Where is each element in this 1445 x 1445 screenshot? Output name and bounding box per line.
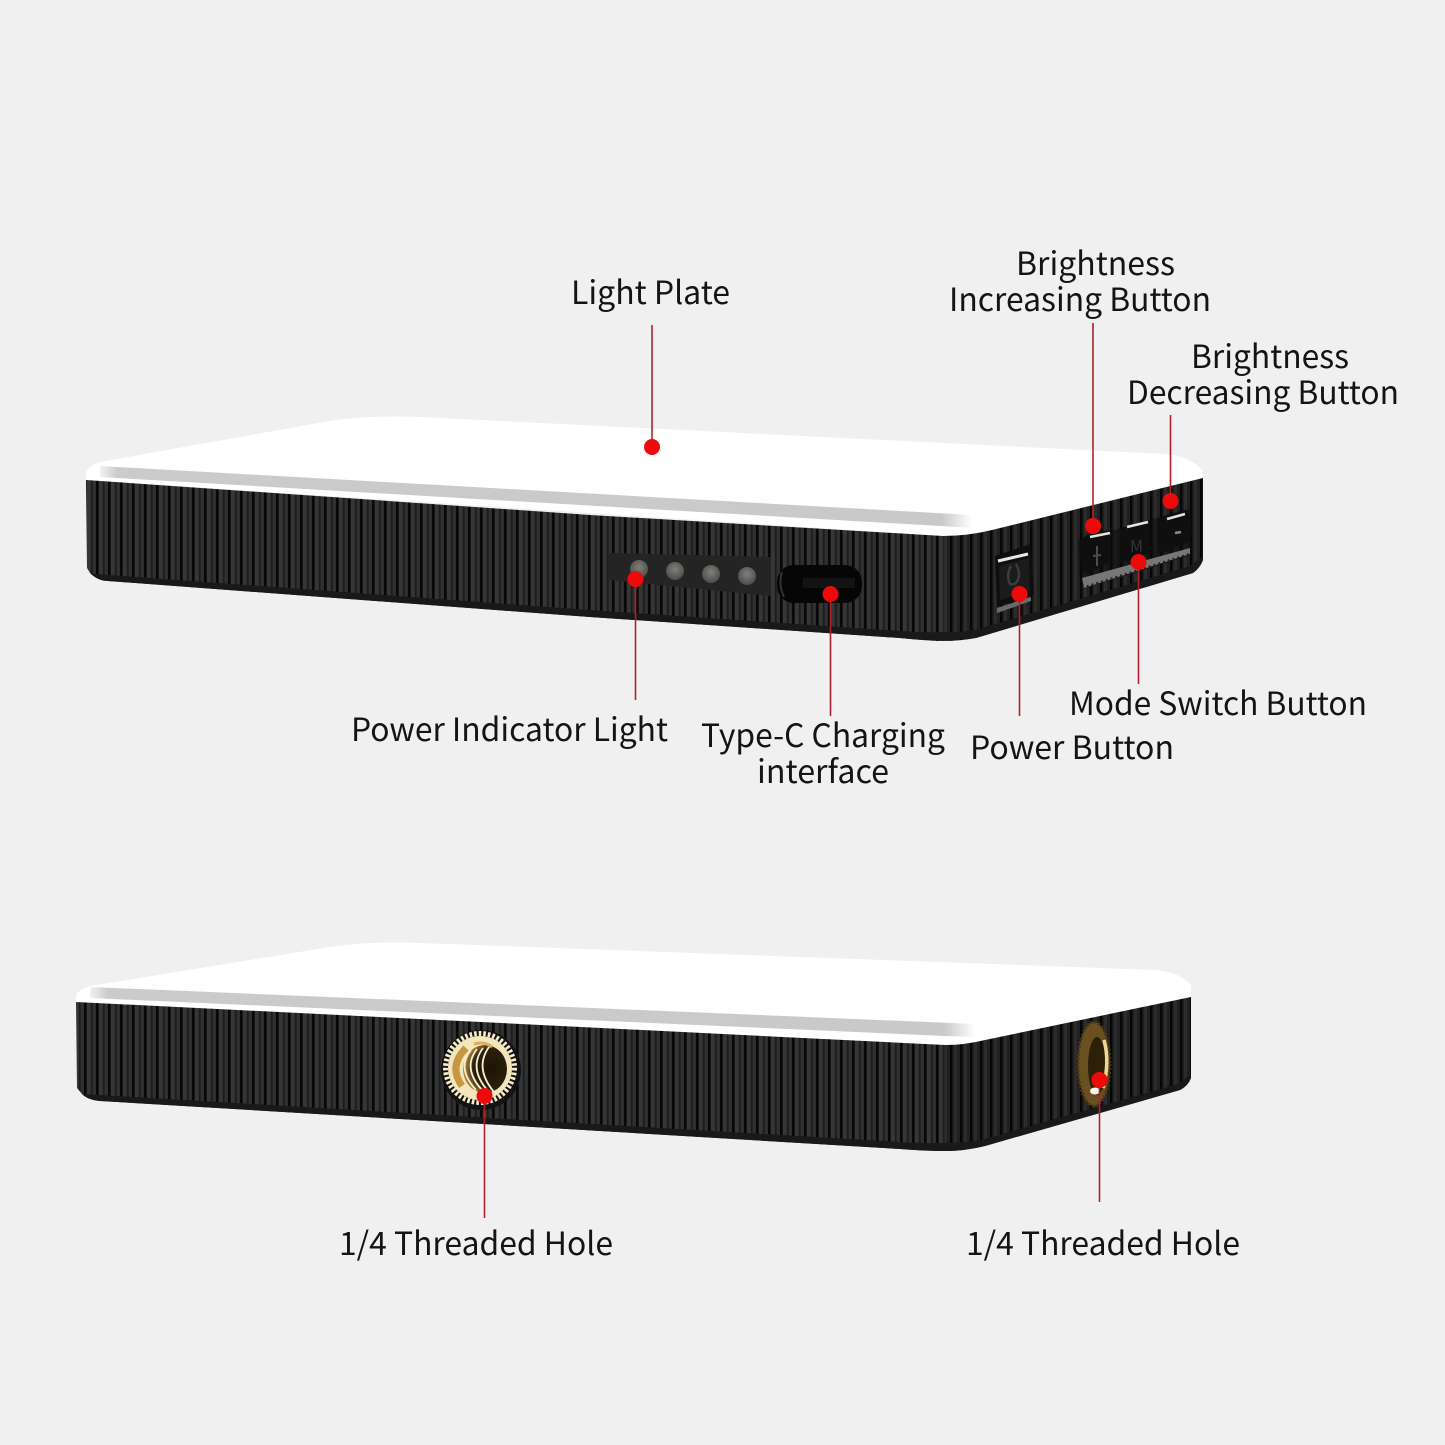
ribbed front side: [86, 480, 943, 641]
callout: Power Indicator Light: [351, 571, 668, 751]
callout: Type-C Charging interface: interface: [757, 747, 889, 793]
ribbed right side: [943, 478, 1203, 641]
side threaded insert: [1078, 1022, 1110, 1106]
ribbed right side: [945, 997, 1191, 1151]
light plate: [76, 942, 1191, 1045]
callout: front 1/4 Threaded Hole: [339, 1088, 613, 1265]
Type-C port: [777, 565, 862, 603]
bottom dark edge: [82, 1074, 1191, 1151]
callout: Brightness Increasing Button: Brightness: [1016, 239, 1175, 285]
callout: Brightness Decreasing Button: Decreasing Button: [1127, 368, 1399, 414]
callout: Mode Switch Button: [1069, 554, 1367, 725]
callout: Power Button: Power Button: [970, 723, 1174, 769]
callout: Brightness Increasing Button: [949, 239, 1211, 534]
device: top view with controls: [86, 416, 1203, 641]
ribbed front side: [76, 1002, 945, 1151]
bottom dark edge: [92, 556, 1203, 640]
power indicator panel with LEDs: [608, 553, 771, 596]
callout: side 1/4 Threaded Hole: 1/4 Threaded Hole: [966, 1219, 1240, 1265]
front threaded insert: [441, 1030, 521, 1110]
callout: front 1/4 Threaded Hole: 1/4 Threaded Hole: [339, 1219, 613, 1265]
callout: Type-C Charging interface: [701, 586, 945, 793]
callout: Brightness Decreasing Button: [1127, 332, 1399, 509]
callout: Mode Switch Button: Mode Switch Button: [1069, 679, 1367, 725]
brightness and mode buttons: [1078, 508, 1192, 590]
callout: side 1/4 Threaded Hole: [966, 1072, 1240, 1265]
callout: Power Indicator Light: Power Indicator Light: [351, 705, 668, 751]
callout: Power Button: [970, 586, 1174, 769]
light plate: [86, 416, 1203, 536]
callout: Light Plate: Light Plate: [571, 268, 730, 314]
callout: Type-C Charging interface: Type-C Charging: [701, 711, 945, 757]
callout: Brightness Increasing Button: Increasing Button: [949, 275, 1211, 321]
device: bottom view with threaded holes: [76, 942, 1191, 1151]
brightness and mode buttons: M: [1130, 533, 1143, 557]
callout: Light Plate: [571, 268, 730, 455]
power button: [995, 544, 1034, 613]
grey bezel band: [100, 466, 972, 528]
grey bezel band: [90, 987, 975, 1037]
callout: Brightness Decreasing Button: Brightness: [1191, 332, 1349, 378]
